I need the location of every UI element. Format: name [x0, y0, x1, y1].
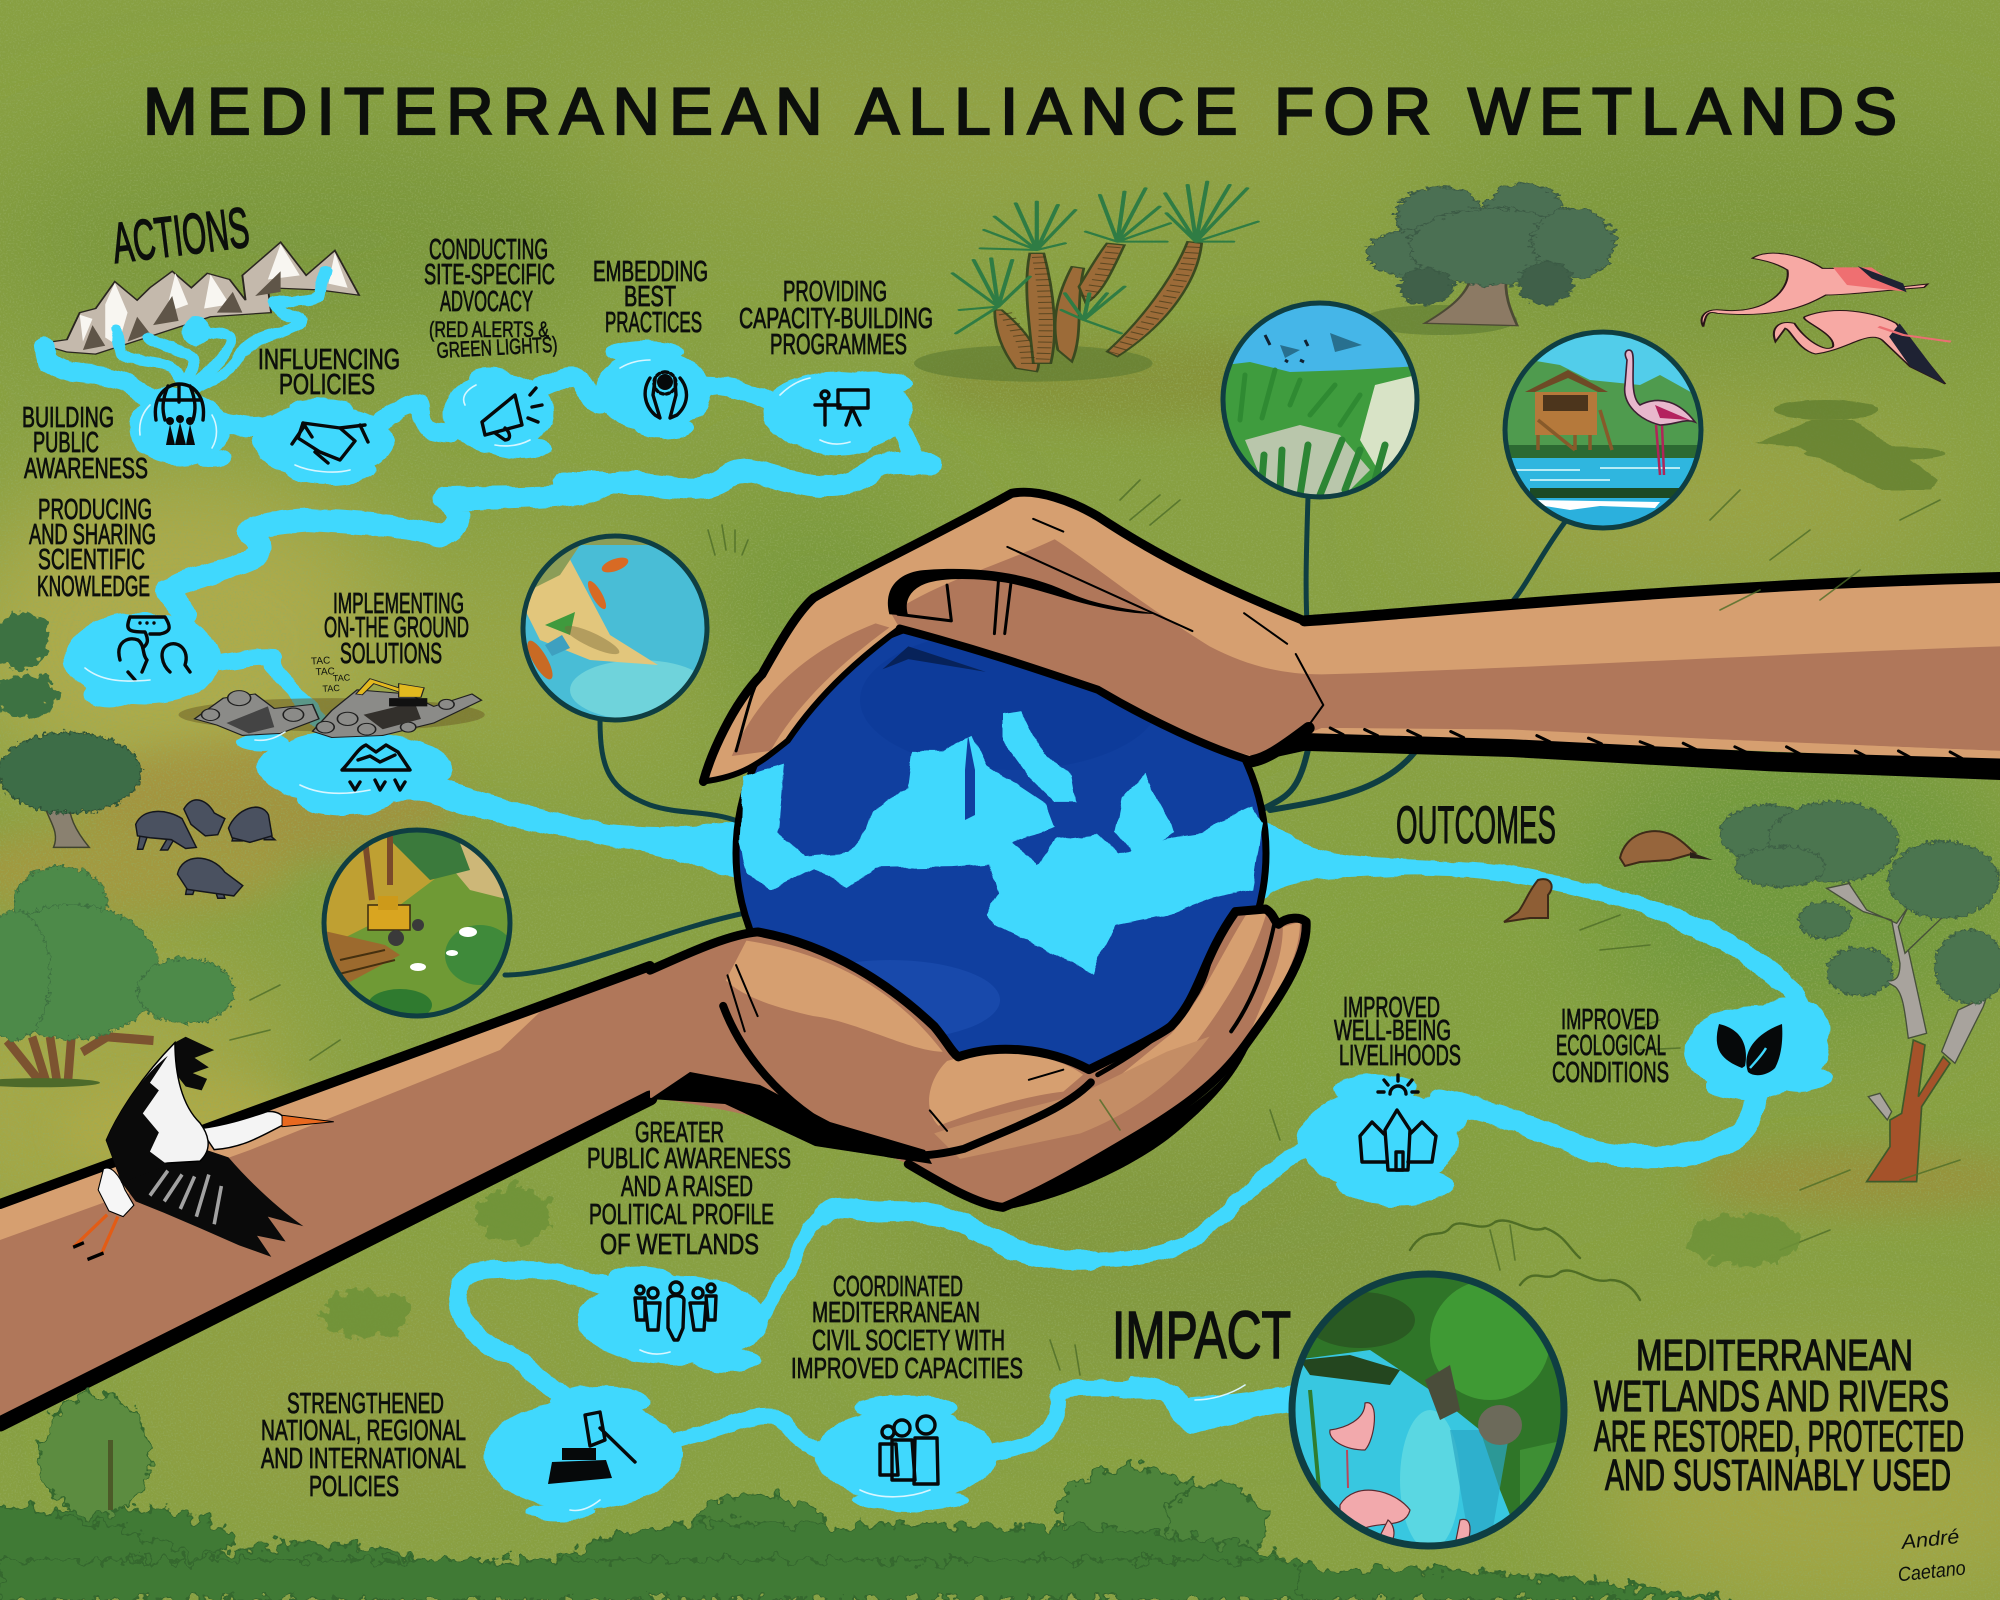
icon: houses and sun — [1360, 1075, 1436, 1170]
label: conducting site-specific advocacy: SITE-SPECIFIC — [424, 259, 555, 291]
tail — [98, 1168, 134, 1217]
icon: megaphone — [482, 388, 542, 440]
outline — [703, 492, 1304, 782]
label: greater public awareness: POLITICAL PROFILE — [589, 1199, 774, 1231]
label: improved ecological conditions: ECOLOGICAL — [1556, 1030, 1666, 1062]
label: improved well-being livelihoods: LIVELIHOODS — [1339, 1040, 1461, 1072]
label: coordinated civil society: IMPROVED CAPACITIES — [791, 1353, 1023, 1385]
icon: handshake — [292, 423, 368, 463]
label: strengthened policies — [261, 1388, 466, 1503]
scenery: flying flamingos and their shadow — [1702, 253, 1951, 490]
label: providing capacity-building programmes: PROGRAMMES — [770, 329, 907, 361]
label: strengthened policies: NATIONAL, REGIONAL — [261, 1415, 466, 1447]
water highlights on ponds — [85, 360, 1245, 1511]
lower wing fan — [121, 1148, 303, 1257]
label: influencing policies: INFLUENCING — [258, 344, 400, 376]
title: MEDITERRANEAN ALLIANCE FOR WETLANDS — [143, 75, 1897, 148]
label: building public awareness: BUILDING — [22, 402, 114, 434]
label: building public awareness: PUBLIC — [33, 427, 99, 459]
label: providing capacity-building programmes: PROVIDING — [783, 276, 887, 308]
scenery: grass tufts — [230, 480, 1960, 1375]
river: outcomes and impact stretch — [458, 815, 1832, 1521]
sound effect text: TAC — [311, 655, 331, 667]
scenery: trees and pigs on the left — [0, 612, 275, 1087]
photo: reef and coastal plants — [1220, 300, 1420, 500]
photo: restored wetland impact circle — [1290, 1270, 1570, 1550]
label: improved well-being livelihoods: IMPROVED — [1343, 992, 1440, 1024]
icon: people talking — [119, 617, 190, 680]
label: building public awareness: AWARENESS — [24, 453, 148, 485]
label: improved ecological conditions: IMPROVED — [1561, 1004, 1659, 1036]
icon: three people figures — [880, 1416, 938, 1484]
land masses — [740, 710, 1263, 974]
artist signature: Caetano — [1897, 1557, 1967, 1586]
scenery: tree on the right — [1720, 802, 2000, 1182]
label: embedding best practices: EMBEDDING — [593, 256, 708, 288]
artist signature — [1893, 1526, 1967, 1586]
label: greater public awareness: GREATER — [635, 1117, 724, 1149]
flamingos in the water — [1330, 1403, 1470, 1548]
label: embedding best practices — [593, 256, 708, 339]
label: building public awareness — [22, 402, 148, 485]
icon: gear held by hands — [645, 372, 686, 418]
photo: beach and boats — [520, 534, 710, 722]
label: influencing policies — [258, 344, 400, 401]
mountain streams — [115, 271, 325, 387]
label: producing and sharing scientific knowledge: KNOWLEDGE — [37, 571, 150, 603]
sound effect text: TAC — [322, 683, 341, 694]
shading on hand and arm — [732, 623, 889, 756]
icon: wetland mountain and reeds — [342, 745, 410, 790]
impact statement — [1594, 1331, 1964, 1500]
scenery: shrubs in the meadow — [319, 1187, 1801, 1339]
sound effect text — [311, 654, 352, 694]
heading: actions: ACTIONS — [109, 196, 253, 276]
label: strengthened policies: POLICIES — [309, 1471, 399, 1503]
label: coordinated civil society: COORDINATED — [833, 1271, 963, 1303]
label: producing and sharing scientific knowledge: AND SHARING — [29, 519, 156, 551]
label: conducting site-specific advocacy — [424, 234, 558, 363]
stork in flight — [73, 1037, 334, 1260]
photo: stilt house and flamingo — [1500, 330, 1705, 530]
white wing and body — [106, 1043, 208, 1171]
heading: impact: IMPACT — [1112, 1298, 1291, 1373]
label: implementing on-the-ground solutions: ON-THE GROUND — [324, 612, 469, 644]
label: conducting site-specific advocacy: GREEN LIGHTS) — [436, 332, 558, 363]
shadow under the palm — [650, 1072, 932, 1164]
label: conducting site-specific advocacy: (RED ALERTS & — [429, 317, 549, 342]
ponds — [65, 341, 912, 816]
main channel — [45, 346, 912, 454]
globe with the Mediterranean basin — [736, 613, 1266, 1093]
large green tree — [0, 866, 234, 1087]
label: implementing on-the-ground solutions: SOLUTIONS — [340, 638, 442, 670]
label: producing and sharing scientific knowledge — [29, 494, 156, 603]
lower arm and cupped hand — [0, 909, 1306, 1427]
label: coordinated civil society — [791, 1271, 1023, 1385]
label: improved ecological conditions — [1552, 1004, 1669, 1089]
scenery: bushes outline — [1410, 1220, 1640, 1300]
icon: two leaves — [1717, 1024, 1782, 1075]
legs — [73, 1215, 118, 1253]
label: coordinated civil society: MEDITERRANEAN — [812, 1297, 980, 1329]
label: coordinated civil society: CIVIL SOCIETY WITH — [812, 1325, 1005, 1357]
arm hair — [1330, 728, 1963, 759]
label: implementing on-the-ground solutions — [324, 588, 469, 670]
scenery: olive tree — [1363, 183, 1614, 335]
icon: presenter with board — [815, 390, 868, 425]
connector lines from photos to globe — [505, 497, 1565, 975]
label: greater public awareness — [587, 1117, 791, 1261]
label: producing and sharing scientific knowledge: PRODUCING — [38, 494, 152, 526]
label: conducting site-specific advocacy: ADVOCACY — [440, 286, 533, 318]
small palm tree — [0, 612, 59, 715]
upper wing tip feathers — [175, 1037, 214, 1090]
icon: globe dome and three people — [155, 384, 203, 445]
label: strengthened policies: AND INTERNATIONAL — [261, 1443, 466, 1475]
river: actions stretch — [45, 271, 931, 885]
scenery: palm cluster — [914, 182, 1258, 382]
label: providing capacity-building programmes: CAPACITY-BUILDING — [739, 303, 933, 335]
label: greater public awareness: PUBLIC AWARENESS — [587, 1143, 791, 1175]
label: improved ecological conditions: CONDITIONS — [1552, 1057, 1669, 1089]
round pine tree — [0, 733, 141, 847]
label: influencing policies: POLICIES — [279, 369, 375, 401]
label: improved well-being livelihoods: WELL-BEING — [1334, 1015, 1451, 1047]
scenery: marmot — [1504, 879, 1552, 922]
forearm — [0, 930, 800, 1427]
label: greater public awareness: OF WETLANDS — [600, 1229, 759, 1261]
construction site with rocks and excavator — [179, 679, 485, 738]
label: embedding best practices: BEST — [624, 281, 676, 313]
label: improved well-being livelihoods — [1334, 992, 1461, 1072]
label: greater public awareness: AND A RAISED — [621, 1171, 753, 1203]
sound effect text: TAC — [315, 666, 335, 678]
sound effect text: TAC — [333, 672, 351, 683]
heading: outcomes: OUTCOMES — [1396, 796, 1556, 855]
palm and fingers — [650, 909, 1306, 1210]
scenery: beaver — [1620, 831, 1713, 866]
artist signature: André — [1899, 1526, 1960, 1554]
upper hand and forearm — [703, 492, 2000, 782]
neck and beak — [200, 1111, 284, 1150]
label: implementing on-the-ground solutions: IMPLEMENTING — [333, 588, 464, 620]
icon: group of people — [635, 1282, 716, 1340]
thumb — [888, 569, 1158, 616]
label: conducting site-specific advocacy: CONDUCTING — [429, 234, 548, 266]
photo: farmland with tractor — [320, 825, 515, 1021]
pigs — [136, 800, 275, 898]
scenery: mountains — [38, 242, 359, 354]
label: producing and sharing scientific knowledge: SCIENTIFIC — [38, 544, 145, 576]
label: embedding best practices: PRACTICES — [605, 307, 702, 339]
scenery: foreground bushes along the bottom — [0, 1395, 1730, 1600]
label: strengthened policies: STRENGTHENED — [287, 1388, 444, 1420]
icon: gavel and block — [548, 1412, 635, 1484]
label: providing capacity-building programmes — [739, 276, 933, 361]
